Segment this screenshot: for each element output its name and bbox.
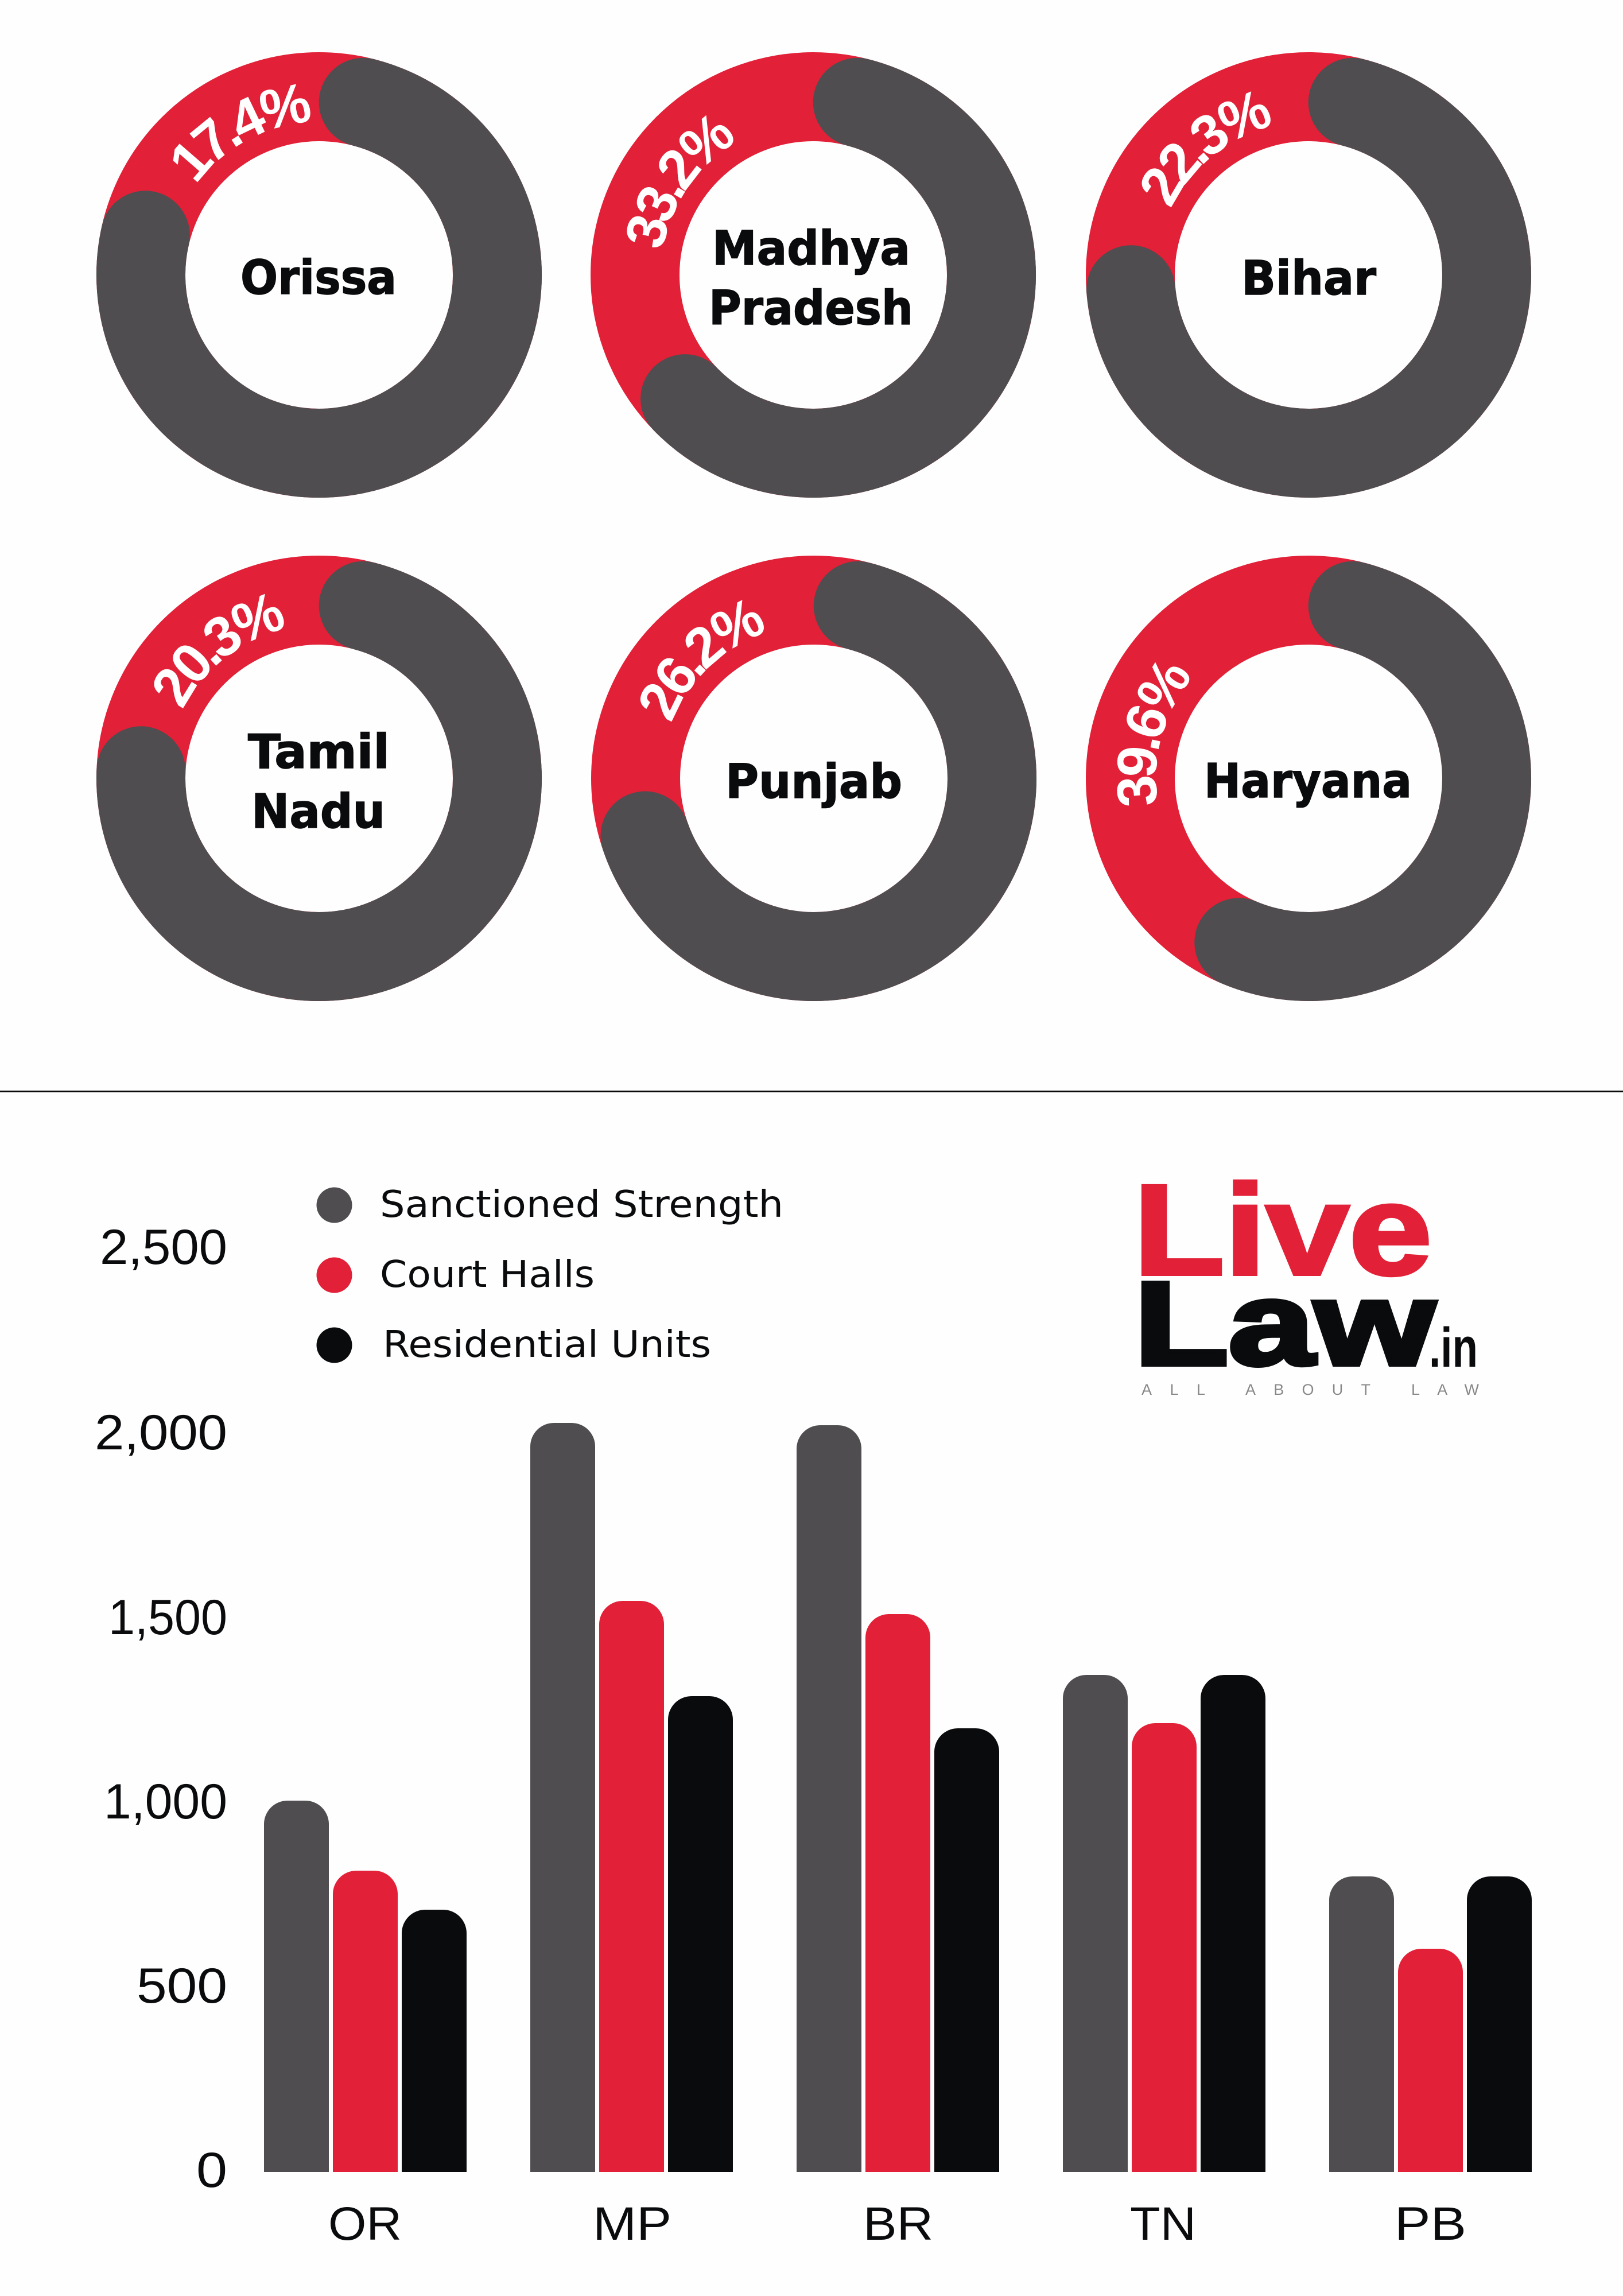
state label: [709, 222, 913, 336]
percentage: 17.4%: [173, 84, 310, 183]
x axis labels: [328, 2198, 1466, 2250]
red ring: [1131, 96, 1486, 453]
legend: [317, 1184, 783, 1366]
y axis labels: 1,000: [104, 1774, 227, 1829]
y axis labels: 500: [137, 1958, 227, 2014]
logo: LiveLaw: Live: [1133, 1158, 1432, 1302]
state label: Punjab: [725, 755, 902, 809]
logo: LiveLaw: [1133, 1158, 1480, 1398]
red ring: [1131, 600, 1486, 956]
logo: LiveLaw: LAW: [1411, 1381, 1480, 1398]
bar group: BR: [797, 1425, 999, 2172]
logo: LiveLaw: ABOUT: [1245, 1381, 1370, 1398]
logo: LiveLaw: Law: [1134, 1258, 1435, 1390]
red ring: [141, 96, 497, 453]
x axis labels: BR: [863, 2198, 933, 2250]
grey arc: [1092, 58, 1525, 492]
grey arc: [102, 561, 536, 995]
percentage: 20.3%: [154, 594, 284, 708]
state label: Madhya: [712, 222, 910, 276]
x axis labels: PB: [1395, 2198, 1466, 2250]
y axis labels: 2,000: [95, 1405, 227, 1460]
percentage: 22.3%: [1142, 91, 1271, 208]
legend item: Court Halls: Court Halls: [380, 1254, 595, 1296]
panel: donut Madhya Pradesh: [591, 52, 1036, 498]
y axis labels: 0: [196, 2143, 227, 2198]
y axis labels: [95, 1220, 227, 2198]
y axis labels: 2,500: [100, 1220, 227, 1275]
panel: donut Tamil Nadu: [96, 556, 542, 1001]
logo: LiveLaw: .in: [1429, 1316, 1478, 1379]
state label: Pradesh: [709, 281, 913, 336]
panel: donut Haryana: [1086, 556, 1531, 1001]
x axis labels: MP: [593, 2198, 671, 2250]
red ring: [636, 600, 992, 956]
bar group: TN: [1063, 1675, 1265, 2172]
percentage: 33.2%: [627, 115, 733, 247]
grey arc: [102, 58, 536, 492]
grey arc: [597, 561, 1031, 995]
panel: donut Bihar: [1086, 52, 1531, 498]
x axis labels: TN: [1130, 2198, 1196, 2250]
state label: Orissa: [240, 251, 397, 305]
bar group: MP: [530, 1423, 733, 2172]
red ring: [141, 600, 497, 956]
state label: Tamil: [248, 725, 390, 779]
grey arc: [596, 58, 1030, 492]
panel: donut Punjab: [591, 556, 1036, 1001]
logo: LiveLaw: ALL: [1141, 1381, 1205, 1398]
panel: donut Orissa: [96, 52, 542, 498]
state label: [248, 725, 390, 839]
legend item: Residential Units: Residential Units: [383, 1324, 711, 1366]
state label: Bihar: [1241, 251, 1377, 306]
red ring: [635, 96, 992, 453]
y axis labels: 1,500: [108, 1590, 227, 1645]
state label: Nadu: [251, 785, 385, 839]
state label: Haryana: [1204, 754, 1412, 809]
bar group: PB: [1329, 1876, 1532, 2172]
percentage: 39.6%: [1117, 662, 1189, 806]
percentage: 26.2%: [640, 600, 764, 722]
grey arc: [1092, 561, 1525, 995]
x axis labels: OR: [328, 2198, 402, 2250]
legend item: Sanctioned Strength: Sanctioned Strength: [380, 1184, 783, 1226]
bar group: OR: [264, 1801, 467, 2172]
